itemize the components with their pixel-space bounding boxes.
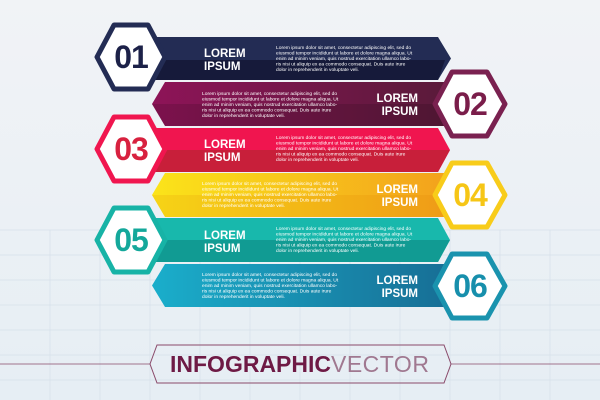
text 06: enim ad minim veniam, quis nostrud exercitation ullamco labo-: [202, 283, 337, 289]
band 01: [155, 37, 451, 80]
title 02: LOREM: [376, 93, 418, 105]
hex 06: [435, 254, 505, 318]
band 04: [152, 173, 445, 217]
text 04: eiusmod tempor incididunt ut labore et dolore magna aliqua. Ut: [202, 186, 339, 192]
text 03: ris nisi ut aliquip ex ea commodo consequat. Duis aute irure: [276, 152, 406, 158]
text 06: ris nisi ut aliquip ex ea commodo consequat. Duis aute irure: [202, 288, 332, 294]
title 04: [376, 184, 418, 209]
hex 05: 05: [114, 222, 148, 258]
title 04: IPSUM: [382, 197, 418, 209]
text 05: Lorem ipsum dolor sit amet, consectetur adipiscing elit, sed do: [276, 226, 411, 232]
text 05: eiusmod tempor incididunt ut labore et dolore magna aliqua. Ut: [276, 232, 413, 238]
hex 01: [97, 25, 165, 89]
text 02: Lorem ipsum dolor sit amet, consectetur adipiscing elit, sed do: [202, 91, 337, 97]
band 03: [155, 128, 450, 172]
hex 02: 02: [453, 86, 487, 122]
title 01: LOREM: [204, 48, 246, 60]
text 06: dolor in reprehenderit in voluptate veli.: [202, 294, 285, 300]
text 01: [276, 45, 413, 73]
text 02: ris nisi ut aliquip ex ea commodo consequat. Duis aute irure: [202, 108, 332, 114]
footer title: INFOGRAPHICVECTOR: [170, 351, 429, 377]
title 01: IPSUM: [204, 61, 240, 73]
text 03: Lorem ipsum dolor sit amet, consectetur adipiscing elit, sed do: [276, 135, 411, 141]
title 05: [204, 230, 246, 255]
text 04: [202, 181, 339, 209]
title 05: IPSUM: [204, 243, 240, 255]
text 01: Lorem ipsum dolor sit amet, consectetur adipiscing elit, sed do: [276, 45, 411, 51]
text 01: enim ad minim veniam, quis nostrud exercitation ullamco labo-: [276, 56, 411, 62]
text 05: dolor in reprehenderit in voluptate veli.: [276, 248, 359, 254]
band 06: [152, 264, 445, 307]
title 01: [204, 48, 246, 73]
title 06: LOREM: [376, 275, 418, 287]
title 02: [376, 93, 418, 118]
text 03: enim ad minim veniam, quis nostrud exercitation ullamco labo-: [276, 146, 411, 152]
hex 06: 06: [453, 268, 487, 304]
text 04: Lorem ipsum dolor sit amet, consectetur adipiscing elit, sed do: [202, 181, 337, 187]
title 05: LOREM: [204, 230, 246, 242]
hex 05: [97, 208, 165, 272]
hex 03: 03: [114, 131, 148, 167]
hex 02: [435, 72, 505, 136]
text 01: eiusmod tempor incididunt ut labore et dolore magna aliqua. Ut: [276, 50, 413, 56]
band 02: [152, 82, 445, 126]
text 02: eiusmod tempor incididunt ut labore et dolore magna aliqua. Ut: [202, 96, 339, 102]
text 02: enim ad minim veniam, quis nostrud exercitation ullamco labo-: [202, 102, 337, 108]
text 02: dolor in reprehenderit in voluptate veli.: [202, 113, 285, 119]
text 03: dolor in reprehenderit in voluptate veli.: [276, 157, 359, 163]
text 05: enim ad minim veniam, quis nostrud exercitation ullamco labo-: [276, 237, 411, 243]
title 03: IPSUM: [204, 152, 240, 164]
text 01: ris nisi ut aliquip ex ea commodo consequat. Duis aute irure: [276, 62, 406, 68]
text 05: [276, 226, 413, 254]
hex 01: 01: [114, 39, 148, 75]
text 06: eiusmod tempor incididunt ut labore et dolore magna aliqua. Ut: [202, 278, 339, 284]
title 03: [204, 139, 246, 164]
text 03: [276, 135, 413, 163]
text 05: ris nisi ut aliquip ex ea commodo consequat. Duis aute irure: [276, 242, 406, 248]
title 02: IPSUM: [382, 106, 418, 118]
text 04: enim ad minim veniam, quis nostrud exercitation ullamco labo-: [202, 192, 337, 198]
band 05: [155, 218, 450, 262]
title 04: LOREM: [376, 184, 418, 196]
footer frame: [0, 345, 600, 383]
hex 03: [97, 117, 165, 181]
text 06: [202, 272, 339, 300]
text 06: Lorem ipsum dolor sit amet, consectetur adipiscing elit, sed do: [202, 272, 337, 278]
text 04: ris nisi ut aliquip ex ea commodo consequat. Duis aute irure: [202, 198, 332, 204]
title 06: [376, 275, 418, 300]
hex 04: 04: [453, 177, 488, 213]
text 02: [202, 91, 339, 119]
title 03: LOREM: [204, 139, 246, 151]
text 01: dolor in reprehenderit in voluptate veli.: [276, 67, 359, 73]
text 04: dolor in reprehenderit in voluptate veli.: [202, 203, 285, 209]
text 03: eiusmod tempor incididunt ut labore et dolore magna aliqua. Ut: [276, 140, 413, 146]
title 06: IPSUM: [382, 288, 418, 300]
hex 04: [435, 163, 505, 227]
